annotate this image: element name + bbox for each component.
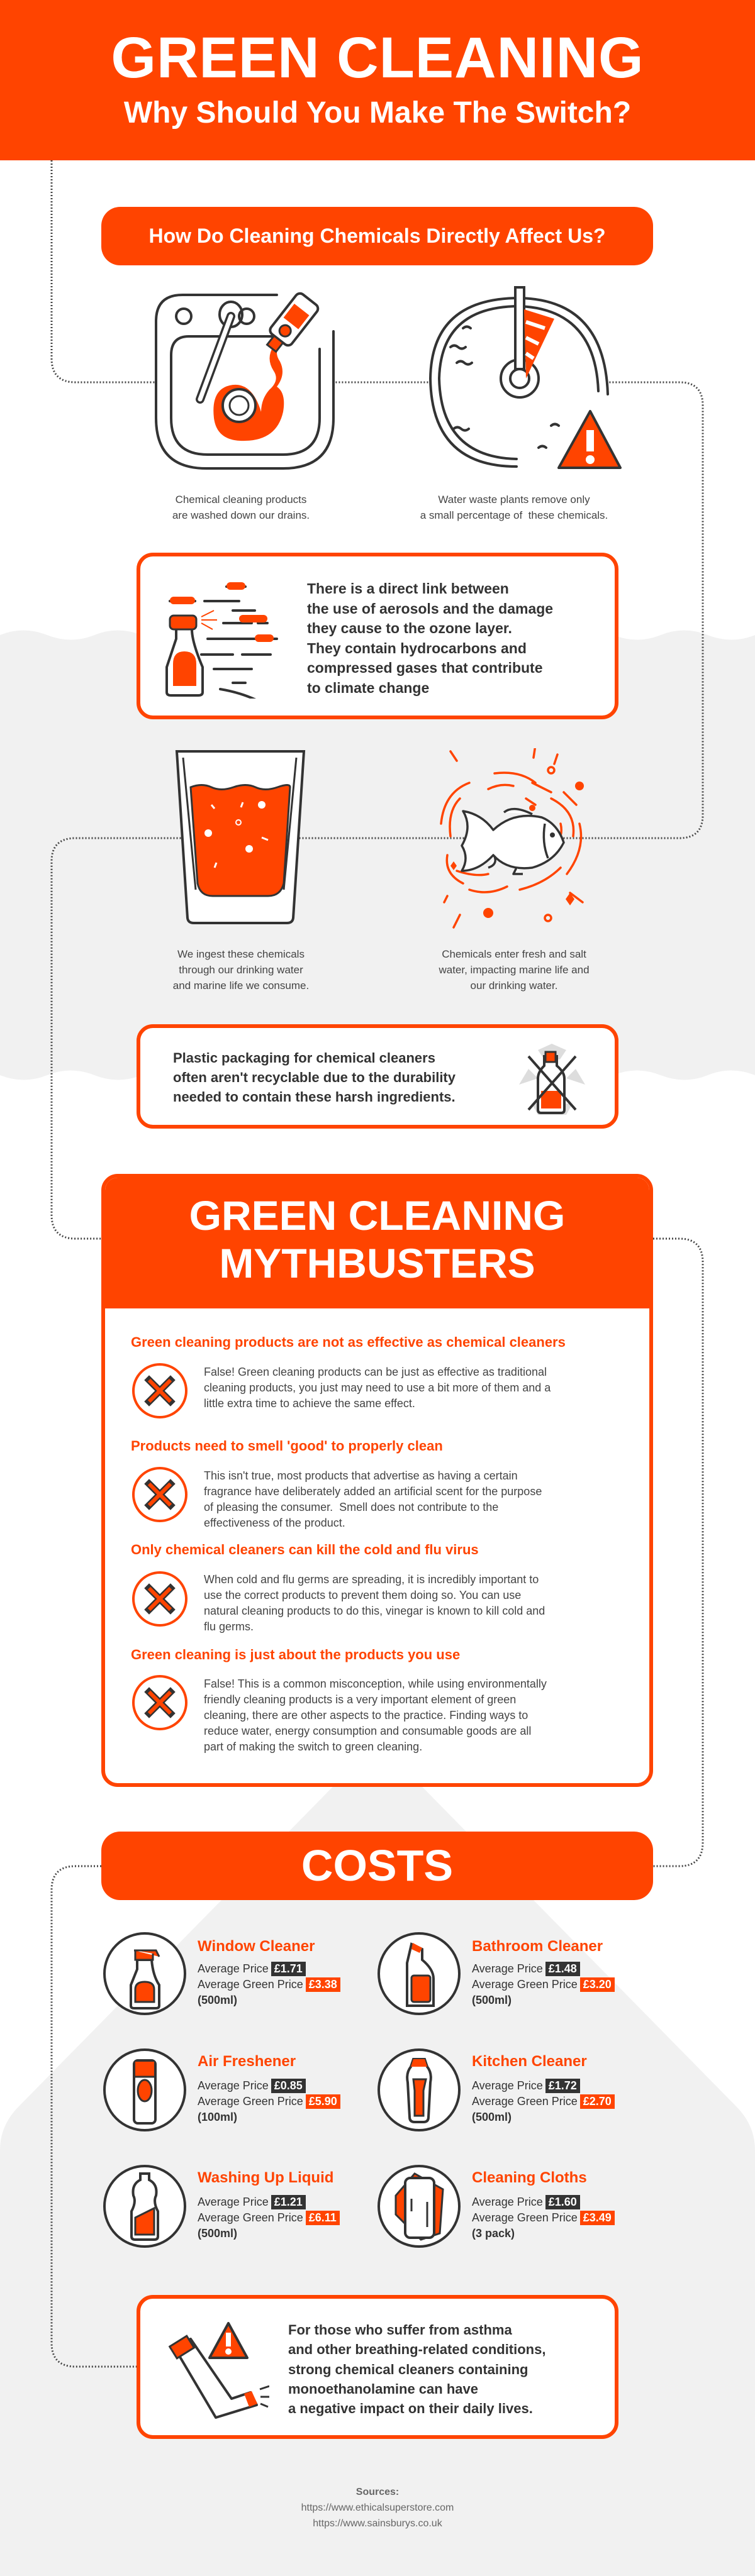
prices: £0.85 <box>274 2079 303 2092</box>
background grey arch for costs <box>0 1787 755 2576</box>
prices <box>472 1962 615 2006</box>
mythbusters header: GREEN CLEANING <box>189 1192 565 1239</box>
prices <box>198 2079 340 2123</box>
myth 4 text: reduce water, energy consumption and consumable goods are all <box>204 1725 531 1737</box>
myth 1 text: little extra time to achieve the same effect. <box>204 1397 415 1410</box>
caption: marine life: our drinking water. <box>471 980 557 992</box>
prices <box>472 2079 615 2123</box>
icon: water treatment plant with warning <box>429 286 622 469</box>
prices <box>198 1962 340 2006</box>
myth 2 text: This isn't true, most products that advertise as having a certain <box>204 1469 518 1482</box>
myth 4 text: cleaning, there are other aspects to the practice. Finding ways to <box>204 1709 528 1722</box>
icon: kitchen bottle <box>378 2048 461 2131</box>
panel: asthma <box>137 2295 618 2439</box>
cost item: bathroom cleaner <box>378 1932 615 2015</box>
myth 1 text <box>204 1366 551 1410</box>
title: Bathroom Cleaner <box>472 1938 603 1955</box>
prices: £2.70 <box>583 2095 612 2108</box>
text: aerosols: There is a direct link between <box>307 580 509 597</box>
title: Washing Up Liquid <box>198 2169 333 2186</box>
icon: aerosol spray <box>165 582 278 699</box>
prices: £6.11 <box>309 2211 337 2224</box>
myth 3 text: use the correct products to prevent them doing so. You can use <box>204 1589 521 1601</box>
prices: Average Price <box>472 2196 543 2208</box>
myth 2 text: effectiveness of the product. <box>204 1517 345 1529</box>
myth 4 text: part of making the switch to green cleaning. <box>204 1740 422 1753</box>
text: asthma: and other breathing-related conditions, <box>288 2341 545 2357</box>
prices: (500ml) <box>198 1994 237 2006</box>
text: aerosols <box>307 580 553 696</box>
mythbusters header <box>101 1174 653 1308</box>
section heading pill <box>101 207 653 265</box>
costs heading pill: COSTS <box>301 1841 453 1890</box>
cost item: kitchen cleaner <box>378 2048 615 2131</box>
caption: drains: are washed down our drains. <box>172 509 310 521</box>
text: asthma <box>288 2320 609 2418</box>
prices: (500ml) <box>198 2227 237 2240</box>
text: plastic packaging: Plastic packaging for chemical cleaners <box>173 1050 435 1066</box>
text: asthma: a negative impact on their daily lives. <box>288 2401 533 2416</box>
icon: fish in polluted water <box>440 748 584 929</box>
title: GREEN CLEANING <box>111 26 644 90</box>
title: Cleaning Cloths <box>472 2169 587 2186</box>
caption: marine life: Chemicals enter fresh and salt <box>442 948 586 960</box>
icon: cloths <box>378 2165 461 2248</box>
prices: £1.71 <box>274 1962 303 1975</box>
panel: plastic packaging <box>137 1024 618 1129</box>
myth 3 heading: Only chemical cleaners can kill the cold and flu virus <box>131 1542 479 1557</box>
subtitle: Why Should You Make The Switch? <box>124 96 631 130</box>
text: asthma: strong chemical cleaners containing <box>288 2362 528 2377</box>
costs heading pill <box>101 1832 653 1900</box>
prices: Average Green Price <box>472 2095 578 2108</box>
prices: Average Price <box>472 2079 543 2092</box>
myth 4 text: False! This is a common misconception, while using environmentally <box>204 1678 547 1690</box>
text: aerosols: They contain hydrocarbons and <box>307 640 527 656</box>
cost item: air freshener <box>103 2048 340 2131</box>
caption: ingest: and marine life we consume. <box>173 980 309 992</box>
caption: ingest: through our drinking water <box>179 964 303 976</box>
prices: Average Green Price <box>472 2211 578 2224</box>
prices: Average Green Price <box>472 1978 578 1991</box>
text: plastic packaging: often aren't recyclable due to the durability <box>173 1070 456 1085</box>
prices: (100ml) <box>198 2111 237 2123</box>
header banner <box>0 0 755 160</box>
title: Air Freshener <box>198 2053 296 2070</box>
myth 1 text: cleaning products, you just may need to use a bit more of them and a <box>204 1381 551 1394</box>
prices: £3.20 <box>583 1978 612 1991</box>
text: aerosols: the use of aerosols and the damage <box>307 600 553 616</box>
text: aerosols: they cause to the ozone layer. <box>307 620 512 636</box>
caption: marine life: water, impacting marine life and <box>439 964 590 976</box>
prices: £5.90 <box>309 2095 337 2108</box>
prices: Average Price <box>198 2196 269 2208</box>
prices: (500ml) <box>472 1994 512 2006</box>
text: plastic packaging: needed to contain these harsh ingredients. <box>173 1089 456 1105</box>
prices: Average Price <box>198 1962 269 1975</box>
title: Window Cleaner <box>198 1938 315 1955</box>
myth 4 heading: Green cleaning is just about the products you use <box>131 1647 460 1662</box>
panel: mythbusters <box>101 1174 653 1787</box>
title: Kitchen Cleaner <box>472 2053 587 2070</box>
text: aerosols: to climate change <box>307 679 429 695</box>
prices: (500ml) <box>472 2111 512 2123</box>
caption: water waste plants: a small percentage of these chemicals. <box>420 509 608 521</box>
icon: glass of contaminated water <box>175 750 306 924</box>
icon: inhaler with warning <box>169 2320 269 2421</box>
caption: water waste plants <box>420 494 608 521</box>
prices <box>472 2195 615 2240</box>
myth 4 text <box>204 1678 547 1753</box>
section heading pill: How Do Cleaning Chemicals Directly Affect Us? <box>148 224 606 247</box>
background grey band with waves <box>0 630 755 1080</box>
panel: aerosols <box>137 553 618 719</box>
prices: £1.72 <box>549 2079 577 2092</box>
text: asthma: monoethanolamine can have <box>288 2381 478 2397</box>
icon: non-recyclable bottle <box>519 1044 585 1115</box>
icon: washing up bottle <box>103 2165 186 2248</box>
myth 4 text: friendly cleaning products is a very important element of green <box>204 1693 516 1706</box>
icon: spray bottle <box>103 1932 186 2015</box>
mythbusters header: MYTHBUSTERS <box>219 1240 535 1286</box>
myth 1 heading: Green cleaning products are not as effective as chemical cleaners <box>131 1334 566 1350</box>
icon: aerosol can <box>103 2048 186 2131</box>
prices: £3.49 <box>583 2211 612 2224</box>
prices: Average Price <box>472 1962 543 1975</box>
myth 3 text: When cold and flu germs are spreading, it is incredibly important to <box>204 1573 539 1586</box>
prices <box>198 2195 340 2240</box>
caption: water waste plants: Water waste plants remove only <box>438 494 590 506</box>
icon: cross 2 <box>132 1467 187 1522</box>
caption: ingest: We ingest these chemicals <box>177 948 305 960</box>
cost item: window cleaner <box>103 1932 340 2015</box>
sources: https://www.sainsburys.co.uk <box>313 2518 442 2529</box>
prices: £3.38 <box>309 1978 337 1991</box>
myth 2 text: fragrance have deliberately added an artificial scent for the purpose <box>204 1485 542 1498</box>
sources: Sources: <box>356 2487 399 2497</box>
icon: cross 1 <box>132 1363 187 1418</box>
cost item: cleaning cloths <box>378 2165 615 2248</box>
icon: cross 4 <box>132 1675 187 1730</box>
text: aerosols: compressed gases that contribute <box>307 660 542 676</box>
prices: Average Price <box>198 2079 269 2092</box>
caption: drains: Chemical cleaning products <box>176 494 306 506</box>
caption: drains <box>172 494 310 521</box>
myth 2 text <box>204 1469 542 1529</box>
sources <box>189 2484 566 2531</box>
caption: marine life <box>439 948 590 992</box>
prices: (3 pack) <box>472 2227 515 2240</box>
myth 2 text: of pleasing the consumer. Smell does not contribute to the <box>204 1501 498 1513</box>
icon: bathroom bottle <box>378 1932 461 2015</box>
myth 2 heading: Products need to smell 'good' to properly clean <box>131 1438 443 1454</box>
cost item: washing up liquid <box>103 2165 340 2248</box>
myth 3 text: flu germs. <box>204 1620 254 1633</box>
prices: Average Green Price <box>198 1978 303 1991</box>
text: plastic packaging <box>173 1050 456 1105</box>
myth 1 text: False! Green cleaning products can be just as effective as traditional <box>204 1366 547 1378</box>
prices: Average Green Price <box>198 2095 303 2108</box>
icon: cross 3 <box>132 1571 187 1627</box>
caption: ingest <box>173 948 309 992</box>
prices: £1.48 <box>549 1962 577 1975</box>
prices: Average Green Price <box>198 2211 303 2224</box>
prices: £1.60 <box>549 2196 577 2208</box>
icon: sink with chemical <box>155 292 335 470</box>
text: asthma: For those who suffer from asthma <box>288 2322 512 2338</box>
sources: https://www.ethicalsuperstore.com <box>301 2502 454 2513</box>
prices: £1.21 <box>274 2196 303 2208</box>
myth 3 text: natural cleaning products to do this, vinegar is known to kill cold and <box>204 1605 545 1617</box>
myth 3 text <box>204 1573 545 1633</box>
